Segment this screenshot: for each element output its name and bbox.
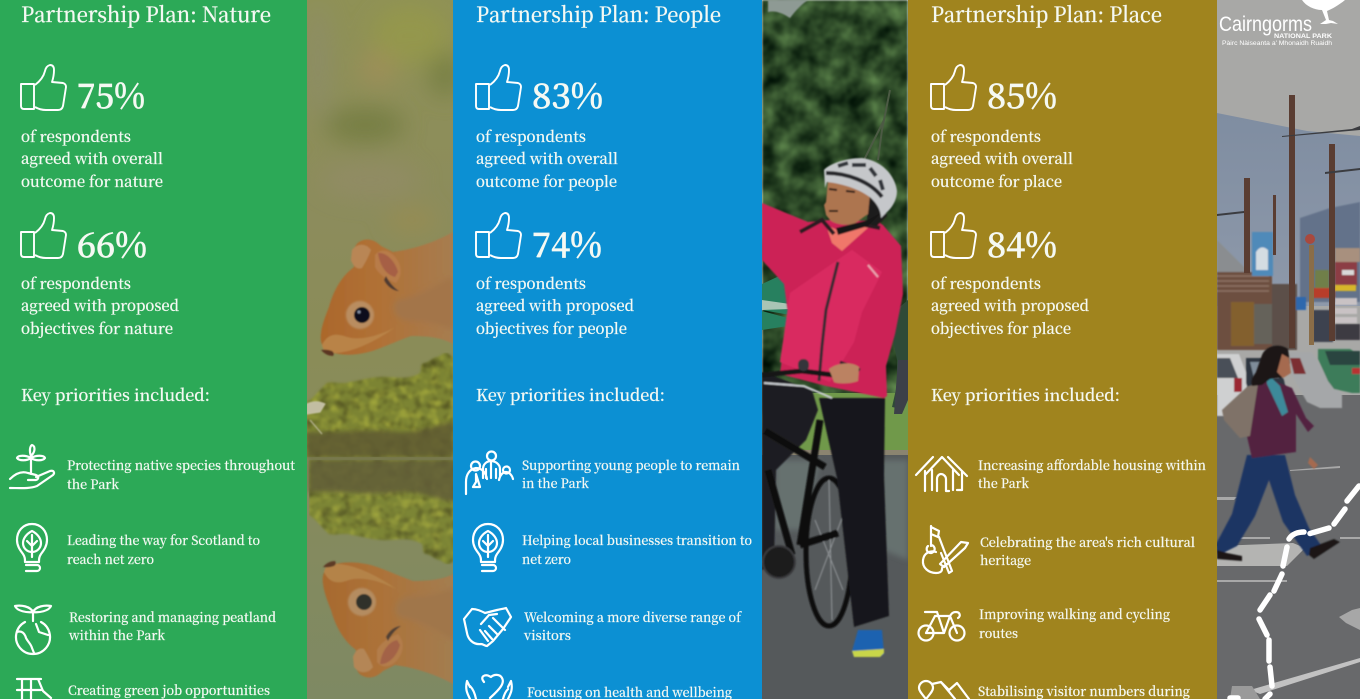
- priority: peatland: within the Park: [68, 625, 166, 644]
- logo: Cairngorms National Park: [1219, 0, 1345, 47]
- stat: 83 percent: 83%: [532, 69, 603, 118]
- cyclist: [762, 158, 903, 657]
- stat: 85 percent: 85%: [987, 69, 1057, 118]
- text block: proposed objectives: agreed with proposed: [21, 295, 179, 316]
- icon: palette and instruments: [923, 526, 968, 573]
- bicycle frame: [765, 420, 838, 555]
- priority: native species: Protecting native species throughout: [67, 455, 295, 474]
- stat: 74 percent: 74%: [532, 218, 602, 267]
- road: [1217, 395, 1360, 699]
- photo: street scene with pedestrian: [1216, 0, 1360, 699]
- text block: proposed objectives: of respondents: [931, 273, 1041, 294]
- priority: local businesses: Helping local businesses transition to: [522, 530, 752, 549]
- panel: nature: [0, 0, 307, 699]
- icon: thumbs up second: [931, 213, 976, 258]
- text block: proposed objectives: agreed with proposed: [476, 295, 634, 316]
- text block: overall outcome: [476, 126, 618, 192]
- priority: native species: the Park: [67, 474, 120, 493]
- icon: heart in hands: [466, 675, 512, 699]
- priority: net zero: [67, 530, 260, 568]
- text block: overall outcome: outcome for place: [931, 171, 1062, 192]
- logo: Cairngorms National Park: Pàirc Nàiseanta a' Mhonaidh Ruaidh: [1222, 40, 1332, 47]
- priority: young people: in the Park: [522, 473, 590, 492]
- green tent: [762, 271, 790, 330]
- background person: [892, 300, 908, 409]
- pedestrian: [1216, 346, 1340, 561]
- priority: walking and cycling: [979, 604, 1170, 642]
- text block: overall outcome: agreed with overall: [931, 148, 1073, 169]
- text block: overall outcome: agreed with overall: [21, 148, 163, 169]
- subheading: key priorities: Key priorities included:: [931, 382, 1120, 406]
- icon: earth sprout: [15, 606, 51, 654]
- priority: net zero: Leading the way for Scotland to: [67, 530, 260, 549]
- jacket: [762, 203, 903, 398]
- stat: 84 percent: 84%: [987, 218, 1057, 267]
- photo: red squirrel and reflection: [307, 0, 461, 699]
- text block: proposed objectives: objectives for nature: [21, 318, 173, 339]
- icon: thumbs up second: [476, 213, 521, 258]
- icon: thumbs up: [476, 65, 521, 110]
- stat: 75 percent: 75%: [77, 69, 145, 118]
- panel: place: [908, 0, 1217, 699]
- icon: thumbs up: [931, 65, 976, 110]
- text block: overall outcome: outcome for nature: [21, 171, 163, 192]
- helmet: [824, 158, 897, 218]
- priority: cultural heritage: [980, 532, 1195, 569]
- trousers: [819, 398, 889, 627]
- priority: affordable housing: the Park: [978, 473, 1030, 492]
- icon: thumbs up: [21, 65, 66, 110]
- shoe: [852, 630, 884, 657]
- priority: native species: [67, 455, 295, 493]
- icon: group of people: [466, 452, 513, 494]
- photo: woman with bicycle: [762, 0, 908, 699]
- logo: Cairngorms National Park: Cairngorms: [1219, 13, 1312, 36]
- grass and road: [775, 393, 908, 453]
- priority: local businesses: net zero: [522, 549, 571, 568]
- reflection: [309, 460, 455, 685]
- stat: 66 percent: 66%: [77, 218, 147, 267]
- icon: leaf bulb: [473, 524, 503, 571]
- priority: peatland: [68, 607, 276, 644]
- priority: cultural heritage: heritage: [980, 550, 1031, 569]
- text block: proposed objectives: [931, 273, 1089, 339]
- icon: map pin: [919, 681, 969, 699]
- text block: overall outcome: outcome for people: [476, 171, 617, 192]
- icon: plant in hand: [10, 445, 54, 488]
- dashed route line: [1230, 486, 1359, 699]
- priority: young people: Supporting young people to remain: [522, 455, 740, 474]
- text block: proposed objectives: of respondents: [21, 273, 131, 294]
- text block: overall outcome: [21, 126, 163, 192]
- logo: Cairngorms National Park: NATIONAL PARK: [1274, 33, 1332, 40]
- priority: net zero: reach net zero: [67, 549, 154, 568]
- moss base: [307, 422, 453, 457]
- text block: proposed objectives: [476, 273, 634, 339]
- icon: bicycle: [918, 612, 964, 640]
- priority: affordable housing: Increasing affordable housing within: [978, 455, 1206, 474]
- priority: local businesses: [522, 530, 752, 568]
- lamp posts: [1217, 95, 1360, 348]
- priority: green jobs: Creating green job opportunities: [68, 680, 270, 699]
- icon: green jobs: [17, 679, 51, 699]
- road markings: [1217, 466, 1360, 699]
- text block: overall outcome: agreed with overall: [476, 148, 618, 169]
- priority: diverse visitors: Welcoming a more diverse range of: [524, 607, 743, 626]
- priority: cultural heritage: Celebrating the area's rich cultural: [980, 532, 1195, 551]
- text block: overall outcome: [931, 126, 1073, 192]
- text block: proposed objectives: agreed with proposed: [931, 295, 1089, 316]
- head: [867, 190, 887, 226]
- text block: overall outcome: of respondents: [476, 126, 586, 147]
- handlebar and hand: [762, 371, 857, 378]
- text block: overall outcome: of respondents: [21, 126, 131, 147]
- text block: proposed objectives: objectives for people: [476, 318, 627, 339]
- subheading: key priorities: Key priorities included:: [476, 382, 665, 406]
- priority: walking and cycling: routes: [979, 623, 1018, 642]
- buildings: [1217, 232, 1360, 350]
- bicycle rear wheel: [806, 478, 852, 626]
- icon: houses: [916, 457, 967, 491]
- priority: walking and cycling: Improving walking and cycling: [979, 604, 1170, 623]
- squirrel: [321, 232, 453, 356]
- pale stone: [307, 402, 325, 434]
- priority: peatland: Restoring and managing peatland: [69, 607, 276, 626]
- subheading: key priorities: Key priorities included:: [21, 382, 210, 406]
- text block: proposed objectives: objectives for place: [931, 318, 1071, 339]
- priority: young people: [522, 455, 740, 492]
- text block: proposed objectives: of respondents: [476, 273, 586, 294]
- parked cars: [1217, 349, 1360, 420]
- priority: affordable housing: [978, 455, 1206, 492]
- icon: handshake: [464, 608, 511, 646]
- icon: thumbs up second: [21, 213, 66, 258]
- text block: proposed objectives: [21, 273, 179, 339]
- panel: people: [453, 0, 762, 699]
- moss mound: [307, 353, 453, 457]
- priority: diverse visitors: visitors: [523, 625, 571, 644]
- priority: diverse visitors: [523, 607, 743, 644]
- icon: leaf bulb: [17, 524, 47, 571]
- text block: overall outcome: of respondents: [931, 126, 1041, 147]
